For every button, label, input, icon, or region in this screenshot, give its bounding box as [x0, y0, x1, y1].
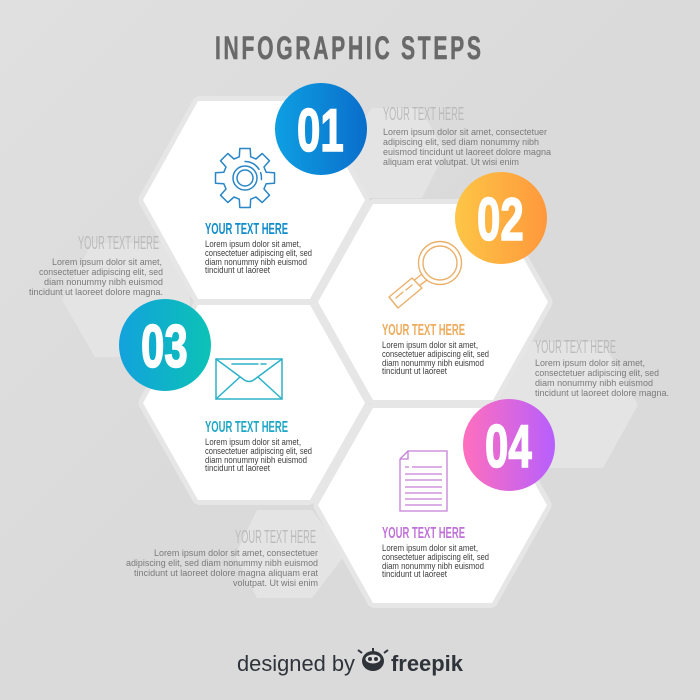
outer text block: right: tincidunt ut laoreet dolore magna.: [535, 388, 669, 399]
panel 3 text: tincidunt ut laoreet: [205, 463, 270, 473]
outer text block: top right: aliquam erat volutpat. Ut wisi enim: [383, 157, 519, 168]
panel 1 text: consectetuer adipiscing elit, sed: [205, 248, 312, 258]
outer text block: bottom: volutpat. Ut wisi enim: [233, 578, 318, 589]
outer text block: bottom: YOUR TEXT HERE: [235, 527, 316, 547]
footer credit: freepik: [391, 651, 464, 676]
outer text block: left: tincidunt ut laoreet dolore magna.: [29, 287, 163, 298]
outer text block: right: YOUR TEXT HERE: [535, 337, 616, 357]
panel 2 text: YOUR TEXT HERE: [382, 322, 465, 339]
panel 3 text: YOUR TEXT HERE: [205, 419, 288, 436]
panel 3 text: diam nonummy nibh euismod: [205, 455, 307, 465]
outer text block: left: diam nonummy nibh euismod: [44, 277, 163, 288]
panel 4 text: [382, 525, 489, 579]
panel 4 text: diam nonummy nibh euismod: [382, 561, 484, 571]
hexagon panel 4: [318, 408, 547, 603]
number badge 01: [275, 83, 367, 175]
icon: envelope: [216, 359, 282, 399]
hexagon panel 3: [143, 305, 365, 500]
hexagon panel 1: [143, 101, 365, 299]
panel 1 text: diam nonummy nibh euismod: [205, 257, 307, 267]
background hexagon: bottom: [235, 510, 345, 598]
outer text block: bottom: tincidunt ut laoreet dolore magna aliquam erat: [134, 568, 318, 579]
outer text block: top right: Lorem ipsum dolor sit amet, consectetuer: [383, 127, 548, 138]
icon: document: [400, 451, 447, 511]
panel 3 text: [205, 419, 312, 473]
outer text block: left: consectetuer adipiscing elit, sed: [39, 267, 163, 278]
outer text block: right: Lorem ipsum dolor sit amet,: [535, 358, 645, 369]
hexagon panel 2: [318, 204, 548, 400]
number badge 04: [463, 399, 555, 491]
panel 4 text: Lorem ipsum dolor sit amet,: [382, 543, 478, 553]
footer credit: designed by: [237, 651, 355, 676]
panel 4 text: tincidunt ut laoreet: [382, 569, 447, 579]
outer text block: top right: adipiscing elit, sed diam nonummy nibh: [383, 137, 539, 148]
outer text block: right: diam nonummy nibh euismod: [535, 378, 653, 389]
outer text block: right: consectetuer adipiscing elit, sed: [535, 368, 659, 379]
number badge 04: 04: [485, 413, 532, 480]
number badge 03: [119, 299, 211, 391]
panel 4 text: YOUR TEXT HERE: [382, 525, 465, 542]
outer text block: top right: euismod tincidunt ut laoreet dolore magna: [383, 147, 552, 158]
panel 4 text: consectetuer adipiscing elit, sed: [382, 552, 489, 562]
icon: magnifying glass: [389, 242, 462, 308]
icon: gear: [216, 148, 274, 208]
panel 1 text: Lorem ipsum dolor sit amet,: [205, 239, 301, 249]
hexagon frame band: [143, 101, 548, 603]
footer credit: [237, 648, 464, 676]
background hexagon: right: [495, 342, 638, 468]
outer text block: right: [535, 337, 669, 399]
background hexagon: left: [62, 243, 190, 357]
panel 2 text: tincidunt ut laoreet: [382, 366, 447, 376]
outer text block: top right: YOUR TEXT HERE: [383, 104, 464, 124]
outer text block: bottom: [126, 527, 319, 589]
outer text block: bottom: Lorem ipsum dolor sit amet, consectetuer: [154, 548, 319, 559]
panel 2 text: consectetuer adipiscing elit, sed: [382, 349, 489, 359]
outer text block: bottom: adipiscing elit, sed diam nonummy nibh euismod: [126, 558, 318, 569]
outer text block: left: Lorem ipsum dolor sit amet,: [52, 257, 162, 268]
panel 1 text: YOUR TEXT HERE: [205, 221, 288, 238]
panel 3 text: consectetuer adipiscing elit, sed: [205, 446, 312, 456]
title: INFOGRAPHIC STEPS: [215, 29, 481, 66]
panel 1 text: tincidunt ut laoreet: [205, 265, 270, 275]
number badge 02: 02: [477, 186, 524, 253]
number badge 01: 01: [297, 97, 344, 164]
panel 1 text: [205, 221, 312, 275]
panel 2 text: Lorem ipsum dolor sit amet,: [382, 340, 478, 350]
number badge 02: [455, 172, 547, 264]
panel 3 text: Lorem ipsum dolor sit amet,: [205, 437, 301, 447]
panel 2 text: diam nonummy nibh euismod: [382, 358, 484, 368]
background hexagon: top right: [340, 108, 445, 198]
number badge 03: 03: [141, 313, 188, 380]
outer text block: left: [29, 233, 163, 298]
outer text block: top right: [383, 104, 552, 168]
outer text block: left: YOUR TEXT HERE: [78, 233, 159, 253]
panel 2 text: [382, 322, 489, 376]
